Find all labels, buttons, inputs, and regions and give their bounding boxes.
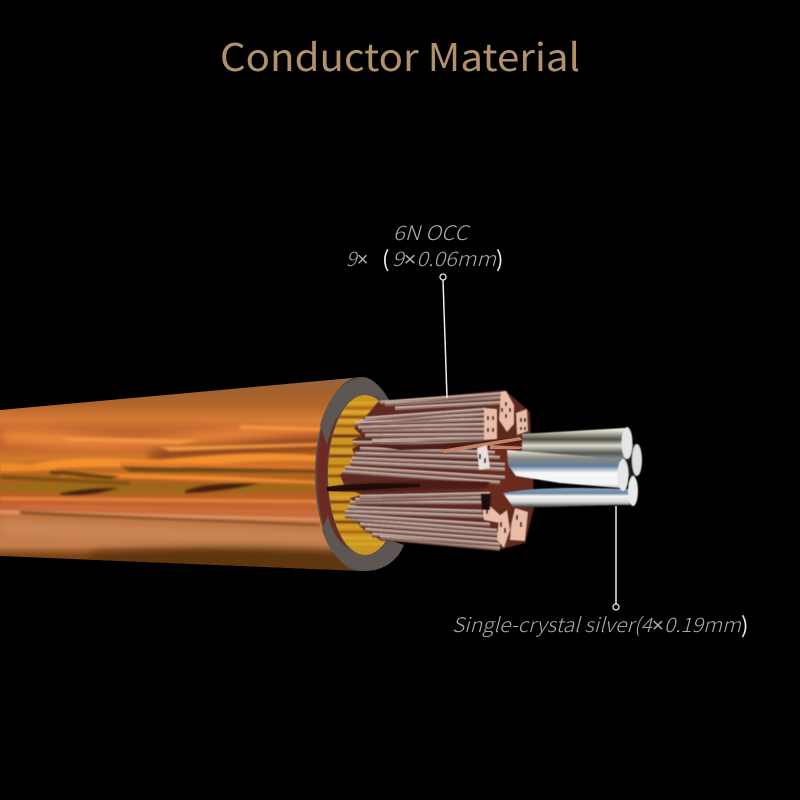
cable jacket xyxy=(0,377,405,575)
label: 6N OCC copper strands: ) xyxy=(496,242,503,274)
label: single-crystal silver strands: Single-crystal silver(4 ×0.19mm xyxy=(452,609,742,638)
cable illustration xyxy=(0,274,642,610)
title: Conductor Material xyxy=(220,27,580,82)
silver strand: back right xyxy=(615,444,642,478)
silver strand: top xyxy=(522,427,632,460)
dark copper streaks xyxy=(327,436,530,492)
pointer: copper strands xyxy=(440,274,447,398)
jacket inner hole xyxy=(328,395,402,555)
copper strands bundle xyxy=(327,390,535,551)
label: 6N OCC copper strands: ( xyxy=(382,242,389,274)
label: 6N OCC copper strands: 9×0.06mm xyxy=(392,243,497,272)
label: 6N OCC copper strands xyxy=(346,217,503,274)
pointer: silver strands xyxy=(613,506,619,610)
silver strand: bottom xyxy=(503,476,638,507)
bundle dark core xyxy=(340,390,534,549)
silver strands xyxy=(503,427,642,507)
label: 6N OCC copper strands: 9× xyxy=(346,243,368,272)
copper strand end faces xyxy=(477,391,528,548)
jacket cut ring xyxy=(315,377,405,571)
label: single-crystal silver strands: ) xyxy=(741,608,748,640)
silver strand: middle xyxy=(507,450,628,491)
label: 6N OCC copper strands: 6N OCC xyxy=(393,217,471,246)
gold shield wires xyxy=(328,401,385,546)
